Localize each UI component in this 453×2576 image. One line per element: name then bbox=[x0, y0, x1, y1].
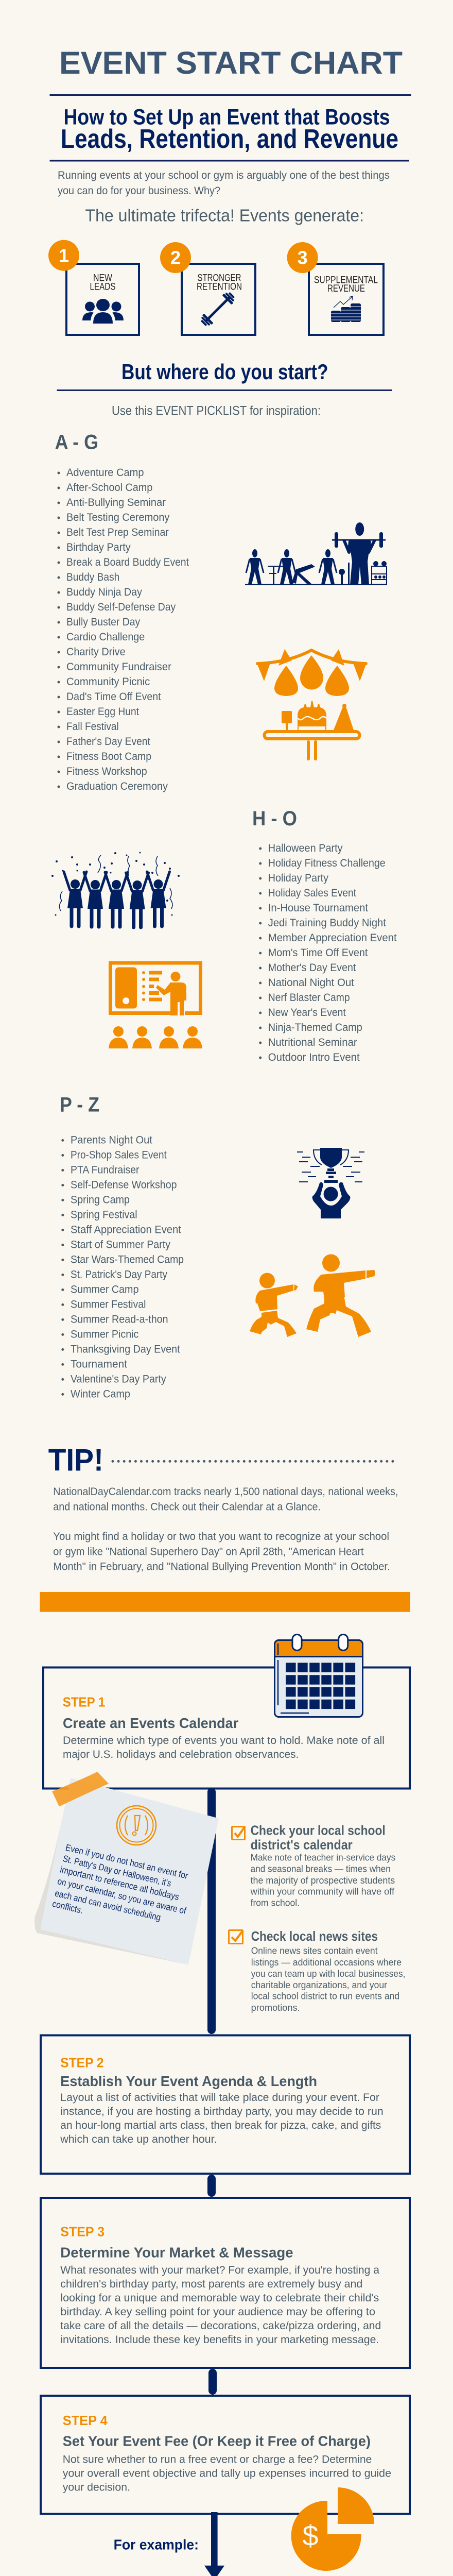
list: P - Z events: Summer Festival bbox=[71, 1298, 146, 1310]
panel: step 3: invitations. Include these key benefits in your marketing message. bbox=[60, 2334, 379, 2346]
heading: TIP: TIP! bbox=[48, 1443, 103, 1477]
card: supplemental revenue: SUPPLEMENTAL bbox=[314, 275, 378, 285]
checklist item: news sites: promotions. bbox=[251, 2003, 300, 2013]
panel: step 3: What resonates with your market? For example, if you're hosting a bbox=[60, 2264, 379, 2276]
icon: celebrating crowd bbox=[51, 852, 180, 927]
sticky note: Even if you do not host an event for bbox=[64, 1842, 189, 1881]
list: A - G events: Buddy Bash bbox=[66, 571, 119, 583]
sticky note: conflicts. bbox=[51, 1899, 84, 1916]
list: H - O events: Nutritional Seminar bbox=[268, 1037, 357, 1048]
list: A - G events: Dad's Time Off Event bbox=[66, 691, 161, 703]
panel: step 3: Determine Your Market & Message bbox=[60, 2244, 293, 2261]
icon: trophy bbox=[297, 1148, 364, 1218]
connector: step 3 to step 4 bbox=[208, 2369, 217, 2395]
list: P - Z events: Summer Read-a-thon bbox=[71, 1313, 168, 1325]
checklist item: news sites bbox=[229, 1928, 405, 2013]
list: H - O events: Jedi Training Buddy Night bbox=[268, 917, 386, 929]
list: A - G events: Fitness Workshop bbox=[66, 766, 147, 777]
orange divider bar bbox=[40, 1592, 410, 1612]
list: A - G events: Community Picnic bbox=[66, 676, 150, 688]
list: P - Z events bbox=[63, 1134, 184, 1400]
panel: step 4: your decision. bbox=[63, 2481, 130, 2493]
tip text: or gym like "National Superhero Day" on April 28th, "American Heart bbox=[53, 1546, 364, 1557]
list: H - O events: Holiday Fitness Challenge bbox=[268, 857, 386, 869]
list: P - Z events: Winter Camp bbox=[71, 1388, 130, 1400]
sticky note: St. Patty's Day or Halloween, it's bbox=[62, 1853, 172, 1889]
icon: presentation bbox=[109, 963, 202, 1048]
panel: step 2: which can take up another hour. bbox=[60, 2133, 217, 2145]
list: A - G events: After-School Camp bbox=[66, 482, 152, 494]
card: new leads: NEW bbox=[93, 273, 112, 284]
panel: step 1 bbox=[43, 1667, 410, 1789]
list: P - Z events: Summer Picnic bbox=[71, 1328, 138, 1340]
panel: step 1: Determine which type of events you want to hold. Make note of all bbox=[63, 1735, 385, 1747]
list: P - Z events: PTA Fundraiser bbox=[71, 1164, 139, 1176]
list: H - O events bbox=[260, 842, 397, 1063]
panel: step 2: Establish Your Event Agenda & Length bbox=[60, 2073, 317, 2089]
checklist item: school calendar bbox=[232, 1823, 395, 1908]
list: H - O events: National Night Out bbox=[268, 977, 354, 989]
arrow: to examples bbox=[204, 2512, 224, 2576]
list: P - Z events: Spring Camp bbox=[71, 1194, 130, 1206]
subtitle bbox=[61, 105, 398, 154]
icon: pie chart with dollar bbox=[291, 2487, 374, 2571]
list: P - Z events: Parents Night Out bbox=[71, 1134, 152, 1146]
list: P - Z events: Star Wars-Themed Camp bbox=[71, 1253, 184, 1265]
icon: calendar bbox=[275, 1634, 362, 1717]
panel: step 4: your overall event objective and tally up expenses incurred to guide bbox=[63, 2468, 391, 2479]
picklist intro: Use this EVENT PICKLIST for inspiration: bbox=[112, 404, 321, 418]
list: A - G events: Fall Festival bbox=[66, 721, 119, 733]
checklist item: school calendar: the majority of prospective students bbox=[251, 1875, 395, 1886]
card: supplemental revenue: 3 bbox=[298, 247, 308, 268]
card: stronger retention: 2 bbox=[170, 247, 181, 268]
list: A - G events: Community Fundraiser bbox=[66, 661, 171, 673]
list: A - G events: Anti-Bullying Seminar bbox=[66, 497, 166, 509]
list: H - O events: Holiday Sales Event bbox=[268, 887, 356, 899]
list: P - Z events: Thanksgiving Day Event bbox=[71, 1343, 180, 1355]
panel: step 2: an hour-long martial arts class, then break for pizza, cake, and gifts bbox=[60, 2120, 381, 2131]
panel: step 2: STEP 2 bbox=[60, 2055, 104, 2070]
panel: step 4: STEP 4 bbox=[63, 2413, 108, 2428]
tip text: You might find a holiday or two that you want to recognize at your school bbox=[53, 1531, 389, 1543]
list: P - Z events: Self-Defense Workshop bbox=[71, 1179, 177, 1191]
panel: step 4: Not sure whether to run a free event or charge a fee? Determine bbox=[63, 2454, 372, 2466]
trifecta heading: The ultimate trifecta! Events generate: bbox=[85, 206, 364, 225]
icon: dumbbell bbox=[199, 290, 237, 328]
intro paragraph: you can do for your business. Why? bbox=[58, 185, 220, 197]
card: stronger retention: STRONGER bbox=[198, 273, 241, 284]
sticky note: important to reference all holidays bbox=[59, 1864, 180, 1902]
intro paragraph bbox=[58, 170, 390, 197]
list: A - G events: Bully Buster Day bbox=[66, 616, 141, 628]
list: A - G events: Charity Drive bbox=[66, 646, 126, 658]
list: H - O events: In-House Tournament bbox=[268, 902, 368, 914]
list: P - Z events: Staff Appreciation Event bbox=[71, 1224, 181, 1235]
panel: step 3: take care of all the details — decorations, cake/pizza ordering, and bbox=[60, 2320, 381, 2332]
list: H - O events: New Year's Event bbox=[268, 1007, 346, 1019]
icon: coins chart bbox=[331, 296, 361, 322]
checklist item: school calendar: Check your local school bbox=[251, 1823, 386, 1838]
title: EVENT START CHART bbox=[59, 45, 403, 80]
tip text bbox=[53, 1486, 398, 1572]
sticky note: on your calendar, so you are aware of bbox=[57, 1876, 187, 1916]
panel: step 1: STEP 1 bbox=[63, 1694, 105, 1709]
panel: step 3: birthday. A key selling point for your audience may be offering to bbox=[60, 2306, 375, 2318]
list: P - Z events: Pro-Shop Sales Event bbox=[71, 1149, 167, 1161]
list: P - Z events: Spring Festival bbox=[71, 1209, 137, 1221]
list: A - G events: Buddy Self-Defense Day bbox=[66, 601, 176, 613]
list: A - G events: Fitness Boot Camp bbox=[66, 751, 151, 762]
list: P - Z events: Valentine's Day Party bbox=[71, 1373, 166, 1385]
card: stronger retention bbox=[160, 242, 255, 335]
tip text: NationalDayCalendar.com tracks nearly 1,500 national days, national weeks, bbox=[53, 1486, 398, 1498]
intro paragraph: Running events at your school or gym is arguably one of the best things bbox=[58, 170, 390, 181]
panel: step 2: Layout a list of activities that will take place during your event. For bbox=[60, 2092, 379, 2104]
panel: step 3 bbox=[41, 2198, 410, 2368]
icon: karate figures bbox=[250, 1254, 375, 1337]
icon: gym silhouettes bbox=[245, 522, 387, 585]
card: supplemental revenue bbox=[287, 242, 384, 335]
panel: step 1: major U.S. holidays and celebration observances. bbox=[63, 1749, 299, 1760]
list: H - O events: Outdoor Intro Event bbox=[268, 1052, 360, 1063]
list: H - O events: Mother's Day Event bbox=[268, 962, 356, 974]
list: A - G events: Graduation Ceremony bbox=[66, 781, 168, 792]
panel: step 1: Create an Events Calendar bbox=[63, 1715, 238, 1731]
card: new leads: 1 bbox=[59, 245, 69, 266]
list: A - G events: Birthday Party bbox=[66, 541, 131, 553]
list: H - O events: Halloween Party bbox=[268, 842, 343, 854]
heading: H - O: H - O bbox=[252, 807, 297, 830]
checklist item: news sites: Check local news sites bbox=[251, 1928, 378, 1944]
list: H - O events: Holiday Party bbox=[268, 872, 328, 884]
heading: A - G: A - G bbox=[55, 431, 98, 454]
label: for example: For example: bbox=[114, 2537, 199, 2552]
list: A - G events: Easter Egg Hunt bbox=[66, 706, 139, 718]
list: A - G events bbox=[59, 467, 189, 792]
list: A - G events: Cardio Challenge bbox=[66, 631, 145, 643]
checklist item: school calendar: within your community will have off bbox=[250, 1887, 395, 1897]
checklist item: school calendar: district's calendar bbox=[251, 1837, 353, 1852]
checklist item: news sites: listings — additional occasions where bbox=[251, 1957, 402, 1968]
icon: pie chart with dollar: $ bbox=[302, 2519, 319, 2552]
panel: step 3: looking for a unique and memorable way to celebrate their child's bbox=[60, 2292, 379, 2304]
list: P - Z events: Tournament bbox=[71, 1358, 127, 1370]
checklist item: news sites: you can team up with local businesses, bbox=[251, 1969, 405, 1979]
subtitle: How to Set Up an Event that Boosts bbox=[64, 105, 390, 130]
icon: people bbox=[82, 299, 124, 324]
list: P - Z events: St. Patrick's Day Party bbox=[71, 1268, 167, 1280]
list: H - O events: Nerf Blaster Camp bbox=[268, 992, 350, 1004]
panel: step 3: children's birthday party, most parents are extremely busy and bbox=[60, 2278, 362, 2290]
card: new leads: LEADS bbox=[90, 281, 115, 292]
list: H - O events: Ninja-Themed Camp bbox=[268, 1022, 362, 1033]
card: new leads bbox=[48, 240, 139, 335]
panel: step 2 bbox=[41, 2035, 410, 2174]
list: P - Z events: Summer Camp bbox=[71, 1283, 138, 1295]
card: stronger retention: RETENTION bbox=[197, 281, 242, 292]
list: P - Z events: Start of Summer Party bbox=[71, 1239, 170, 1250]
list: H - O events: Mom's Time Off Event bbox=[268, 947, 368, 959]
list: A - G events: Belt Test Prep Seminar bbox=[66, 527, 169, 538]
checklist item: school calendar: Make note of teacher in-service days bbox=[251, 1853, 395, 1863]
icon: warning bbox=[117, 1806, 156, 1845]
tip text: Month" in February, and "National Bullying Prevention Month" in October. bbox=[53, 1561, 390, 1572]
tip text: and national months. Check out their Calendar at a Glance. bbox=[53, 1501, 321, 1513]
list: A - G events: Father's Day Event bbox=[66, 736, 150, 748]
sticky note bbox=[34, 1772, 219, 1965]
list: H - O events: Member Appreciation Event bbox=[268, 932, 397, 944]
list: A - G events: Belt Testing Ceremony bbox=[66, 512, 170, 523]
checklist item: news sites: charitable organizations, and your bbox=[251, 1980, 387, 1990]
list: A - G events: Adventure Camp bbox=[66, 467, 144, 479]
sticky note: each and can avoid scheduling bbox=[54, 1888, 162, 1923]
panel: step 3: STEP 3 bbox=[60, 2224, 104, 2239]
list: A - G events: Break a Board Buddy Event bbox=[66, 556, 189, 568]
checklist item: news sites: local school district to run events and bbox=[251, 1991, 399, 2002]
heading: where to start: But where do you start? bbox=[121, 360, 328, 384]
card: supplemental revenue: REVENUE bbox=[327, 283, 365, 294]
checklist item: school calendar: from school. bbox=[251, 1898, 300, 1908]
panel: step 4: Set Your Event Fee (Or Keep it Free of Charge) bbox=[63, 2433, 371, 2449]
connector: step 2 to step 3 bbox=[207, 2175, 216, 2197]
heading: P - Z: P - Z bbox=[60, 1093, 99, 1116]
subtitle: Leads, Retention, and Revenue bbox=[61, 124, 398, 154]
list: A - G events: Buddy Ninja Day bbox=[66, 586, 142, 598]
panel: step 4 bbox=[41, 2396, 410, 2514]
connector: step 1 to step 2 bbox=[207, 1788, 216, 2034]
panel: step 2: instance, if you are hosting a birthday party, you may decide to run bbox=[60, 2106, 384, 2117]
checklist item: news sites: Online news sites contain event bbox=[251, 1946, 378, 1956]
checklist item: school calendar: and seasonal breaks — times when bbox=[251, 1864, 391, 1874]
icon: party cake bbox=[257, 649, 367, 760]
